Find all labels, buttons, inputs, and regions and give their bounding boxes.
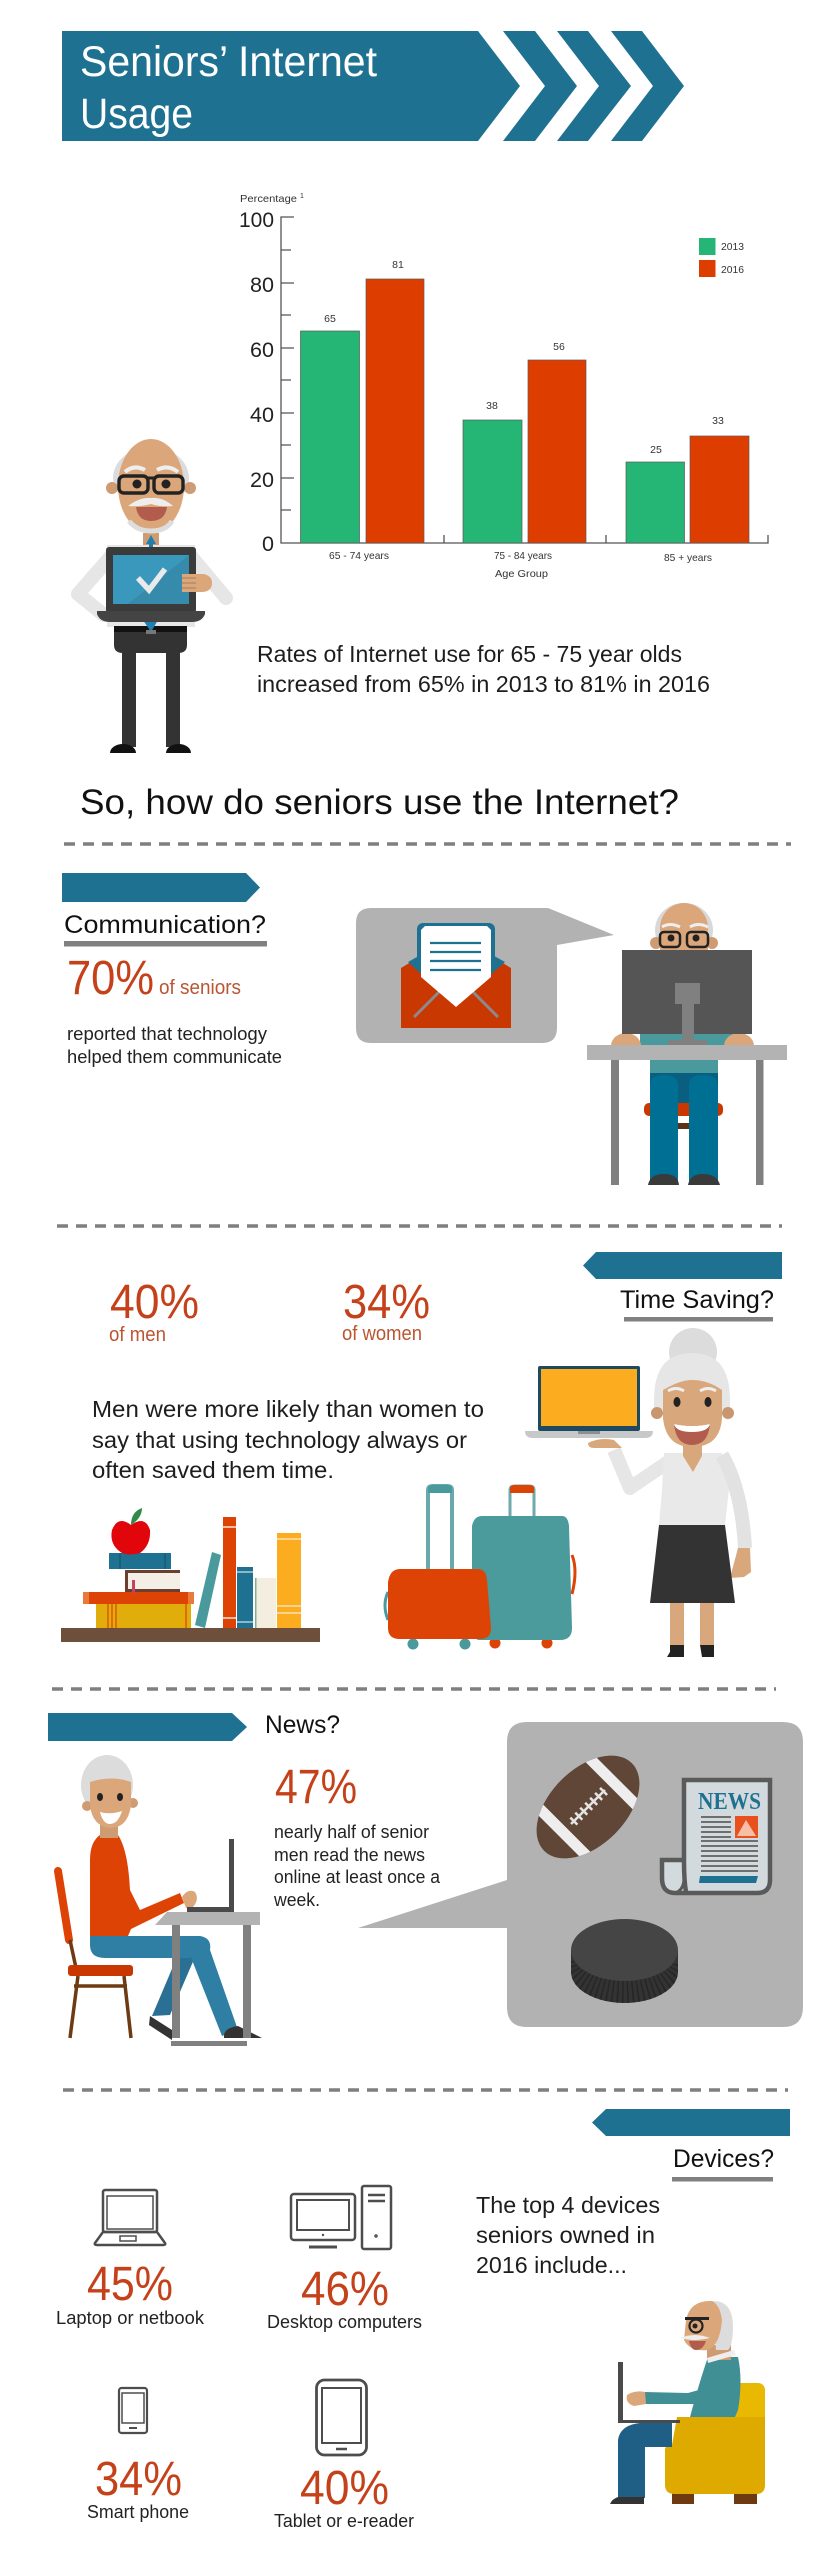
title line 1: Seniors’ Internet	[80, 38, 377, 86]
speech bubble with envelope	[356, 908, 614, 1043]
stat: women: 34%	[343, 1276, 430, 1329]
x axis labels: 75 - 84 years	[494, 550, 552, 562]
summary text: Rates of Internet use for 65 - 75 year olds	[257, 641, 682, 667]
summary text: increased from 65% in 2013 to 81% in 2016	[257, 671, 710, 697]
bar value labels: 56	[553, 341, 565, 353]
banner arrow	[583, 1252, 782, 1279]
legend: 2016	[721, 264, 744, 276]
icon: man at desktop computer	[587, 903, 787, 1185]
heading: Communication?	[64, 911, 266, 939]
description: seniors owned in	[476, 2222, 655, 2248]
legend: 2013	[721, 241, 744, 253]
description: The top 4 devices	[476, 2192, 660, 2218]
description	[92, 1396, 484, 1483]
banner chevrons	[503, 31, 684, 141]
x axis labels	[329, 550, 712, 580]
y axis labels: 100	[239, 209, 274, 232]
icon: football	[536, 1756, 640, 1858]
axes and ticks	[281, 217, 768, 543]
heading: News?	[265, 1711, 340, 1739]
x axis labels: 65 - 74 years	[329, 550, 389, 562]
speech bubble	[358, 1722, 803, 2027]
icon: man holding laptop	[78, 439, 226, 753]
banner arrow	[62, 873, 260, 902]
y axis labels: 80	[250, 274, 274, 297]
description	[67, 1024, 282, 1067]
stat: 47%	[275, 1761, 357, 1814]
title line 2: Usage	[80, 90, 193, 138]
title banner	[62, 31, 684, 141]
stat: men: 40%	[110, 1276, 199, 1329]
icon: man in armchair with laptop	[610, 2301, 765, 2504]
heading: Time Saving?	[620, 1286, 774, 1314]
description: helped them communicate	[67, 1047, 282, 1067]
legend	[699, 238, 744, 277]
bar value labels: 25	[650, 444, 662, 456]
description: say that using technology always or	[92, 1427, 467, 1453]
x axis labels: Age Group	[495, 568, 548, 580]
summary text	[257, 641, 710, 697]
description: Men were more likely than women to	[92, 1396, 484, 1422]
y axis labels: 40	[250, 404, 274, 427]
bar value labels: 65	[324, 313, 336, 325]
icon: books and apple	[61, 1508, 320, 1642]
bars	[300, 279, 749, 543]
icon: newspaper: NEWS	[698, 1789, 761, 1815]
description: often saved them time.	[92, 1457, 334, 1483]
y axis labels: 20	[250, 469, 274, 492]
panel: devices	[56, 2109, 790, 2531]
banner arrow body	[62, 31, 520, 141]
label: laptop: Laptop or netbook	[56, 2308, 205, 2328]
y axis labels: 60	[250, 339, 274, 362]
description: nearly half of senior	[274, 1822, 429, 1842]
description: men read the news	[274, 1845, 425, 1865]
label: desktop: Desktop computers	[267, 2312, 422, 2332]
y axis title: Percentage	[240, 193, 297, 205]
icon: smart phone	[119, 2388, 147, 2433]
label: tablet: Tablet or e-reader	[274, 2511, 414, 2531]
x axis labels: 85 + years	[664, 552, 712, 564]
description: week.	[273, 1890, 320, 1910]
bar value labels: 38	[486, 400, 498, 412]
description	[273, 1822, 441, 1910]
banner arrow	[48, 1713, 247, 1741]
description: online at least once a	[274, 1867, 441, 1887]
stat caption: women: of women	[342, 1323, 422, 1345]
heading underline	[624, 1317, 773, 1322]
icon: woman with laptop	[525, 1328, 751, 1657]
panel: time saving	[61, 1252, 782, 1657]
stat: 70%	[67, 952, 154, 1005]
icon: luggage	[385, 1485, 575, 1650]
icon: laptop	[95, 2190, 165, 2245]
icon: hockey puck	[571, 1919, 678, 2003]
icon: newspaper	[660, 1778, 772, 1895]
bar chart: internet use by age group	[239, 193, 768, 580]
stat caption: men: of men	[109, 1324, 166, 1346]
bar value labels	[324, 259, 724, 456]
y axis labels: 0	[262, 533, 274, 556]
stat caption: of seniors	[159, 977, 241, 999]
icon: desktop computer	[291, 2186, 391, 2249]
icon: tablet	[316, 2380, 366, 2455]
heading: Devices?	[673, 2145, 774, 2173]
label: smart phone: Smart phone	[87, 2502, 189, 2522]
description: reported that technology	[67, 1024, 267, 1044]
description: 2016 include...	[476, 2252, 627, 2278]
stat: smart phone: 34%	[95, 2453, 182, 2506]
icon: man at laptop on chair	[58, 1755, 262, 2046]
heading underline	[64, 941, 267, 946]
stat: desktop: 46%	[301, 2263, 389, 2316]
footnote mark: 1	[300, 193, 304, 200]
banner arrow	[592, 2109, 790, 2136]
heading underline	[672, 2177, 773, 2182]
y axis labels	[239, 209, 274, 556]
bar value labels: 33	[712, 415, 724, 427]
stat: tablet: 40%	[300, 2462, 389, 2515]
section heading: So, how do seniors use the Internet?	[80, 783, 679, 822]
stat: laptop: 45%	[87, 2258, 173, 2311]
panel: communication	[62, 873, 787, 1185]
panel: news	[48, 1711, 803, 2046]
bar value labels: 81	[392, 259, 404, 271]
description	[476, 2192, 660, 2278]
